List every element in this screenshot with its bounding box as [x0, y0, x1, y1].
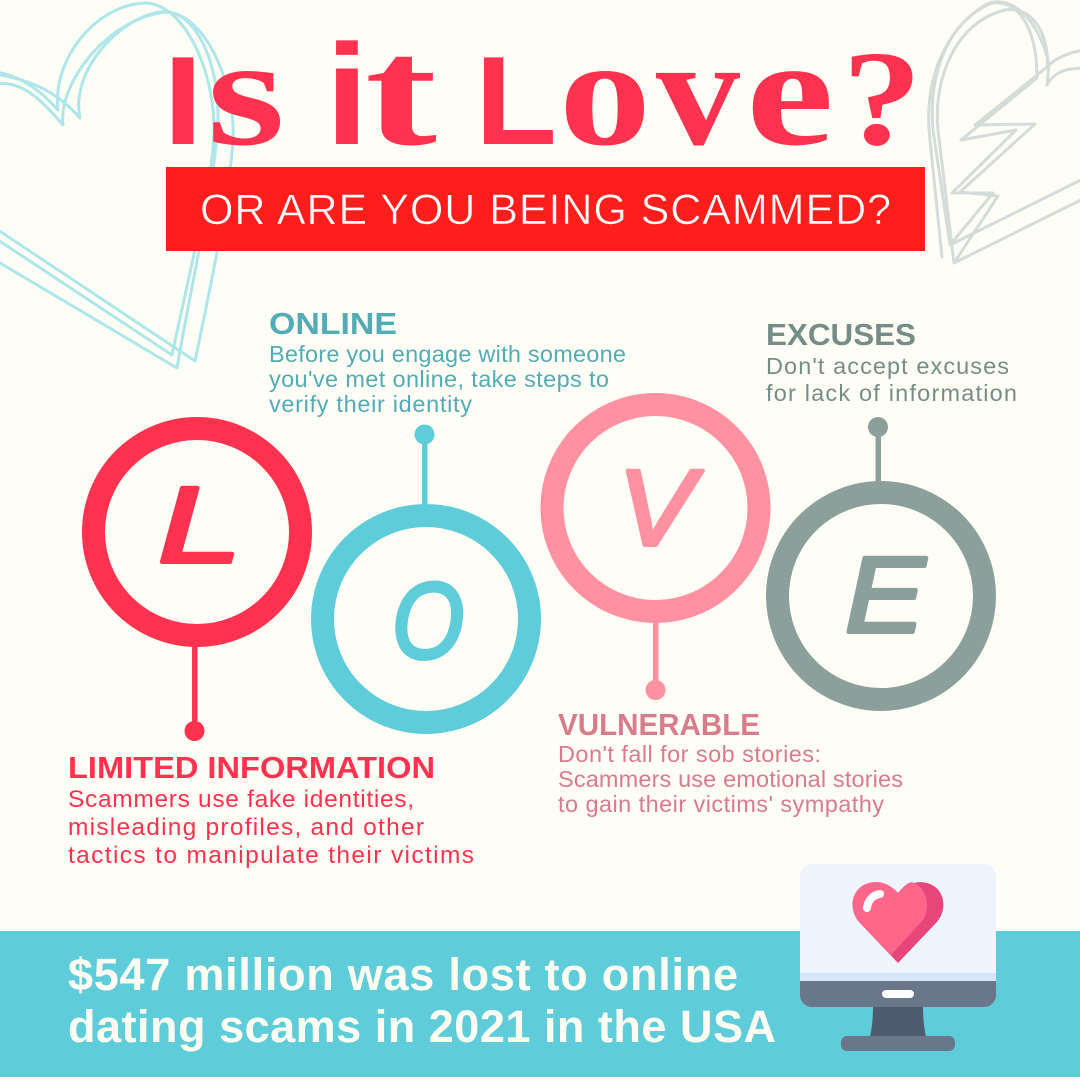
statistic text: dating scams in 2021 in the USA	[68, 1001, 776, 1052]
subtitle banner	[166, 167, 925, 251]
title: v	[656, 6, 741, 178]
title: ?	[842, 24, 922, 174]
circle E with connector	[778, 417, 984, 700]
text block: excuses: EXCUSES	[766, 317, 916, 352]
title: I	[163, 30, 203, 171]
title: i	[325, 16, 369, 175]
text block: online	[269, 306, 626, 417]
text block: online: you've met online, take steps to	[269, 366, 609, 392]
title: t	[365, 6, 437, 178]
text block: limited information: misleading profiles, and other	[68, 814, 424, 841]
text block: limited information: LIMITED INFORMATION	[68, 750, 435, 785]
circle O with connector	[322, 424, 530, 722]
text block: vulnerable: to gain their victims' sympathy	[558, 791, 884, 817]
text block: vulnerable	[558, 707, 903, 817]
text block: vulnerable: Scammers use emotional stories	[558, 766, 903, 792]
text block: limited information	[68, 750, 474, 869]
circle E with connector: E	[845, 534, 927, 655]
title: L	[475, 30, 557, 171]
title: e	[746, 6, 834, 178]
text block: online: ONLINE	[269, 306, 397, 341]
bottom banner	[0, 931, 1080, 1077]
title: o	[559, 6, 651, 178]
decoration: grey broken heart	[929, 2, 1080, 263]
circle O with connector: O	[392, 560, 464, 681]
decoration: blue hand-drawn heart	[0, 3, 233, 368]
text block: vulnerable: VULNERABLE	[558, 707, 760, 742]
circle L with connector: L	[158, 464, 242, 585]
text block: limited information: tactics to manipulate their victims	[68, 842, 474, 869]
text block: limited information: Scammers use fake identities,	[68, 786, 414, 813]
text block: vulnerable: Don't fall for sob stories:	[558, 741, 821, 767]
text block: excuses: for lack of information	[766, 380, 1017, 406]
icon: computer monitor with heart	[800, 864, 996, 1051]
circle L with connector	[94, 428, 300, 741]
statistic text: $547 million was lost to online	[68, 949, 738, 1000]
circle V with connector	[552, 404, 759, 700]
circle V with connector: V	[618, 447, 703, 568]
text block: online: verify their identity	[269, 391, 472, 417]
statistic text	[68, 949, 776, 1052]
text block: online: Before you engage with someone	[269, 341, 626, 367]
title: s	[207, 6, 285, 178]
text block: excuses: Don't accept excuses	[766, 353, 1009, 379]
text block: excuses	[766, 317, 1017, 406]
subtitle banner: OR ARE YOU BEING SCAMMED?	[200, 186, 891, 234]
